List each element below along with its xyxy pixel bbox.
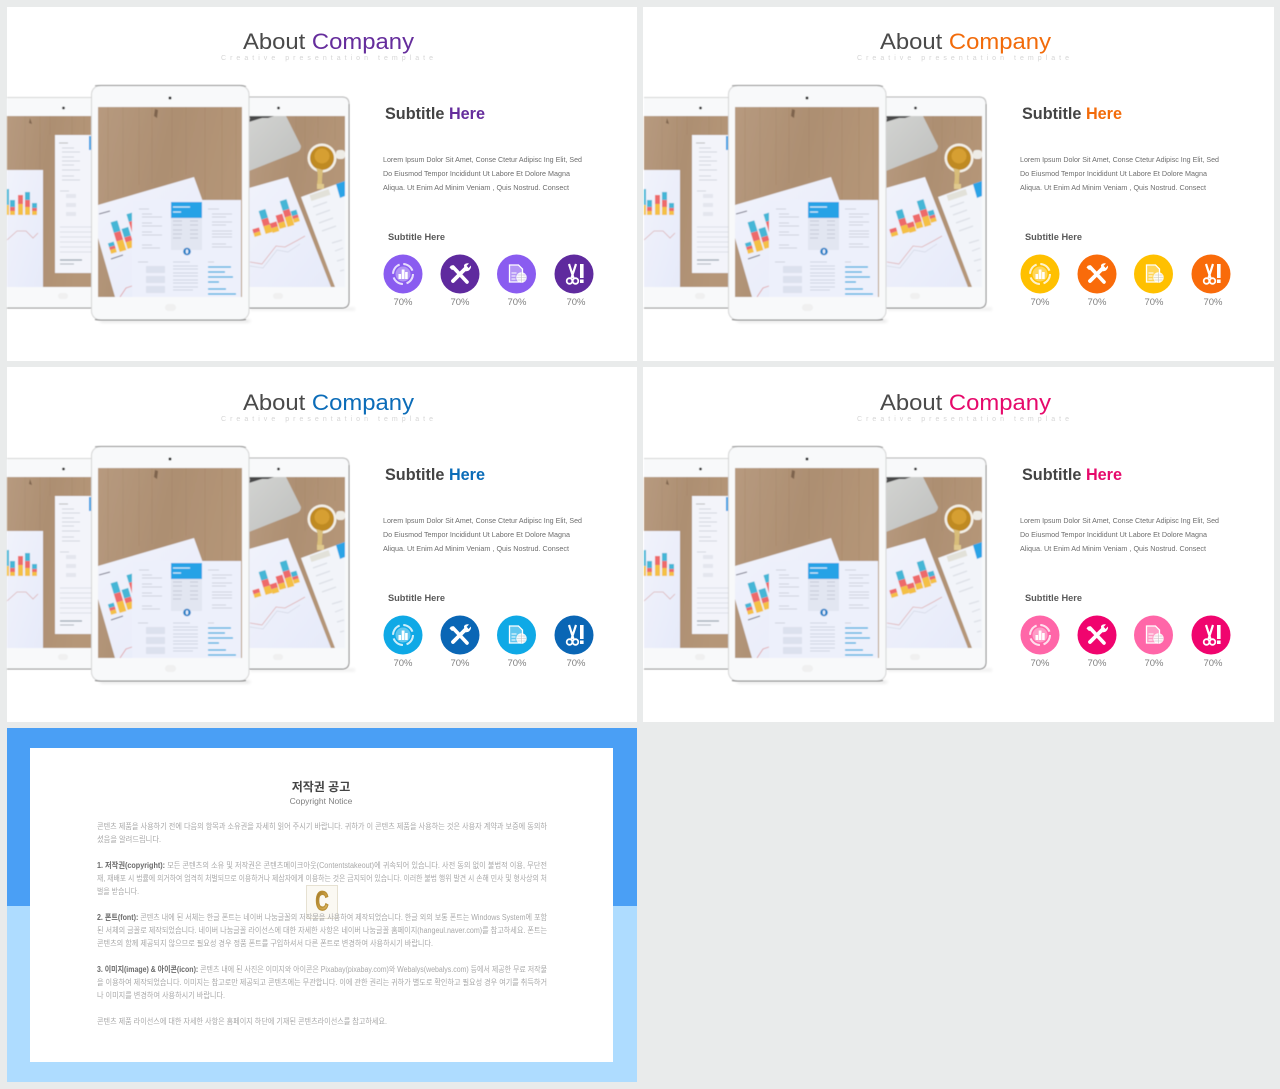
- title: About Company: [880, 29, 1052, 54]
- body text: Aliqua. Ut Enim Ad Minim Veniam , Quis Nostrud. Consect: [1020, 544, 1206, 553]
- icon row: 70%: [1203, 658, 1223, 669]
- tablet photo group: [7, 446, 355, 683]
- tagline: Creative presentation template: [221, 55, 433, 62]
- icon row: 70%: [1144, 658, 1164, 669]
- section 3 image and icon: [97, 964, 547, 1000]
- title: About Company: [243, 29, 415, 54]
- tablet photo group: [644, 86, 992, 322]
- tagline: Creative presentation template: [857, 55, 1069, 62]
- icon row: [384, 254, 594, 308]
- body text: [1020, 516, 1219, 553]
- section 3 image and icon: 을 이용하여 제작되었습니다. 이미지는 참고로만 제공되고 콘텐츠에는 무관합니다. 이에 관한 권리는 귀하가 별도로 확인하고 필요성 경우 여기를 취득하거: [97, 977, 547, 987]
- panel: blue slide: [7, 367, 637, 722]
- panel: pink slide: [643, 367, 1274, 722]
- section 2 font: 2. 폰트(font): 콘텐츠 내에 된 서체는 한글 폰트는 네이버 나눔글꼴의 저작물을 사용하여 제작되었습니다. 한글 외의 보통 폰트는 Windows System에 포함: [97, 912, 548, 922]
- subtitle heading: Subtitle Here: [1022, 466, 1122, 484]
- icon row: 70%: [393, 297, 413, 308]
- closing line: 콘텐츠 제품 라이선스에 대한 자세한 사항은 홈페이지 하단에 기재된 콘텐츠라이선스를 참고하세요.: [97, 1016, 387, 1026]
- notice heading: 저작권 공고: [292, 779, 350, 794]
- secondary subtitle: Subtitle Here: [388, 232, 445, 242]
- title: About Company: [243, 390, 415, 415]
- body text: Lorem Ipsum Dolor Sit Amet, Conse Ctetur Adipisc Ing Elit, Sed: [1020, 155, 1219, 164]
- section 3 image and icon: 나 이미지를 변경하여 사용하시기 바랍니다.: [97, 990, 225, 1000]
- title: About Company: [880, 390, 1052, 415]
- logo: [306, 886, 338, 918]
- body text: Aliqua. Ut Enim Ad Minim Veniam , Quis Nostrud. Consect: [383, 544, 569, 553]
- icon row: 70%: [1087, 658, 1107, 669]
- icon row: [1020, 254, 1230, 308]
- icon row: 70%: [1203, 297, 1223, 308]
- icon row: 70%: [566, 658, 586, 669]
- body text: [383, 516, 582, 553]
- logo: C: [316, 886, 328, 916]
- section 2 font: 콘텐츠의 함께 제공되지 않으므로 필요성 경우 정품 폰트를 구입하셔서 다른 폰트로 변경하여 사용하시기 바랍니다.: [97, 938, 433, 948]
- icon row: [384, 616, 594, 669]
- tablet photo group: [7, 86, 355, 322]
- section 3 image and icon: 3. 이미지(image) & 아이콘(icon): 콘텐츠 내에 된 사진은 이미지와 아이콘은 Pixabay(pixabay.com)와 Webalys(webalys.com) 등에서 제공한 무료 저작물: [97, 964, 547, 974]
- intro paragraph: 셨음을 알려드립니다.: [97, 834, 161, 844]
- tagline: Creative presentation template: [857, 416, 1069, 423]
- icon row: 70%: [1030, 658, 1050, 669]
- subtitle heading: Subtitle Here: [385, 105, 485, 123]
- body text: Do Eiusmod Tempor Incididunt Ut Labore Et Dolore Magna: [1020, 169, 1207, 178]
- intro paragraph: [97, 821, 548, 844]
- section 1 copyright: 1. 저작권(copyright): 모든 콘텐츠의 소유 및 저작권은 콘텐츠메이크아웃(Contentstakeout)에 귀속되어 있습니다. 사전 동의 없이 불법적 이용, 무단전: [97, 860, 547, 870]
- body text: Aliqua. Ut Enim Ad Minim Veniam , Quis Nostrud. Consect: [383, 183, 569, 192]
- icon row: 70%: [507, 297, 527, 308]
- body text: Do Eiusmod Tempor Incididunt Ut Labore Et Dolore Magna: [383, 530, 570, 539]
- body text: Lorem Ipsum Dolor Sit Amet, Conse Ctetur Adipisc Ing Elit, Sed: [1020, 516, 1219, 525]
- body text: [383, 155, 582, 192]
- icon row: 70%: [1030, 297, 1050, 308]
- secondary subtitle: Subtitle Here: [1025, 593, 1082, 603]
- section 1 copyright: [97, 860, 547, 896]
- body text: Do Eiusmod Tempor Incididunt Ut Labore Et Dolore Magna: [383, 169, 570, 178]
- icon row: 70%: [1087, 297, 1107, 308]
- notice subheading: Copyright Notice: [290, 796, 353, 806]
- body text: Do Eiusmod Tempor Incididunt Ut Labore Et Dolore Magna: [1020, 530, 1207, 539]
- section 1 copyright: 재, 재배포 시 법률에 의거하여 엄격히 처벌되므로 이용하거나 제삼자에게 이용하는 것은 금지되어 있습니다. 이러한 불법 행위 발견 시 손해 민사 및 형사상의 처: [97, 873, 547, 883]
- tablet photo group: [644, 446, 992, 683]
- section 2 font: 된 서체의 글꼴로 제작되었습니다. 네이버 나눔글꼴 라이선스에 대한 자세한 사항은 네이버 나눔글꼴 홈페이지(hangeul.naver.com)를 참고하세요. 폰트는: [97, 925, 547, 935]
- body text: Lorem Ipsum Dolor Sit Amet, Conse Ctetur Adipisc Ing Elit, Sed: [383, 516, 582, 525]
- body text: Aliqua. Ut Enim Ad Minim Veniam , Quis Nostrud. Consect: [1020, 183, 1206, 192]
- subtitle heading: Subtitle Here: [1022, 105, 1122, 123]
- subtitle heading: Subtitle Here: [385, 466, 485, 484]
- icon row: 70%: [507, 658, 527, 669]
- secondary subtitle: Subtitle Here: [1025, 232, 1082, 242]
- icon row: 70%: [1144, 297, 1164, 308]
- body text: [1020, 155, 1219, 192]
- tagline: Creative presentation template: [221, 416, 433, 423]
- body text: Lorem Ipsum Dolor Sit Amet, Conse Ctetur Adipisc Ing Elit, Sed: [383, 155, 582, 164]
- secondary subtitle: Subtitle Here: [388, 593, 445, 603]
- section 1 copyright: 벌을 받습니다.: [97, 886, 139, 896]
- intro paragraph: 콘텐츠 제품을 사용하기 전에 다음의 항목과 소유권을 자세히 읽어 주시기 바랍니다. 귀하가 이 콘텐츠 제품을 사용하는 것은 사용자 계약과 보증에 동의하: [97, 821, 548, 831]
- icon row: 70%: [566, 297, 586, 308]
- panel: copyright notice slide: [7, 728, 637, 1082]
- panel: orange slide: [643, 7, 1274, 361]
- icon row: 70%: [393, 658, 413, 669]
- icon row: 70%: [450, 658, 470, 669]
- icon row: [1020, 616, 1230, 669]
- icon row: 70%: [450, 297, 470, 308]
- panel: purple slide: [7, 7, 637, 361]
- section 2 font: [97, 912, 548, 948]
